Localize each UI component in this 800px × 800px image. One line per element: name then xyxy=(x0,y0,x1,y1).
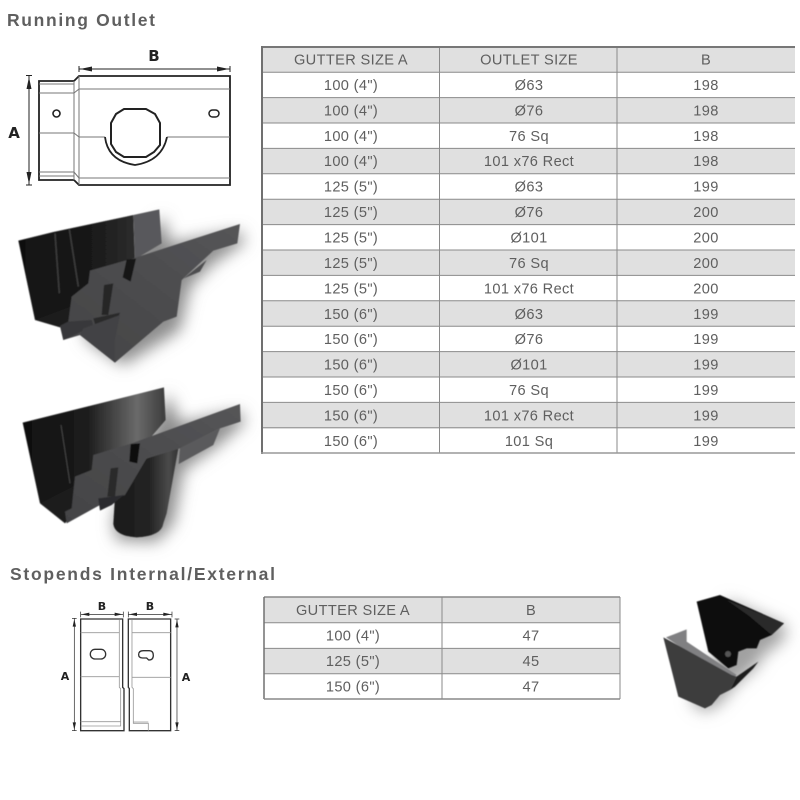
row: 198 xyxy=(693,104,719,120)
row fills xyxy=(262,47,795,428)
row: 150 (6") xyxy=(324,358,378,374)
row: Ø76 xyxy=(515,205,543,221)
row xyxy=(324,154,719,170)
table header: B xyxy=(526,603,536,619)
row: 150 (6") xyxy=(324,332,378,348)
row: 198 xyxy=(693,78,719,94)
row: Ø63 xyxy=(515,180,543,196)
row: 200 xyxy=(693,205,719,221)
row xyxy=(324,358,719,374)
pipe flange xyxy=(179,428,220,464)
row: Ø63 xyxy=(515,307,543,323)
row xyxy=(324,104,719,120)
row: 199 xyxy=(693,332,719,348)
row: 199 xyxy=(693,434,719,450)
outlet hole xyxy=(111,109,160,157)
photo: running outlet without pipe xyxy=(18,209,245,365)
gutter floor xyxy=(35,305,75,327)
row: Ø63 xyxy=(515,78,543,94)
table header: GUTTER SIZE A xyxy=(294,52,408,68)
row: 101 x76 Rect xyxy=(484,154,574,170)
diagram: running outlet dimensions xyxy=(26,66,230,185)
data table: stopends xyxy=(264,597,620,699)
title: Running Outlet: Running Outlet xyxy=(7,10,155,30)
row: 125 (5") xyxy=(326,654,380,670)
label A right: A xyxy=(182,671,191,684)
row: 100 (4") xyxy=(326,628,380,644)
row: 150 (6") xyxy=(324,434,378,450)
table header: GUTTER SIZE A xyxy=(296,603,410,619)
plate clips xyxy=(123,259,136,282)
row xyxy=(324,332,719,348)
row: 100 (4") xyxy=(324,129,378,145)
gutter body xyxy=(60,224,240,363)
back wall xyxy=(18,215,135,320)
row: 125 (5") xyxy=(324,180,378,196)
fixing holes xyxy=(53,110,60,117)
row: 76 Sq xyxy=(509,383,549,399)
rear stopend xyxy=(697,595,784,668)
row: 125 (5") xyxy=(324,230,378,246)
row: 199 xyxy=(693,408,719,424)
row: 47 xyxy=(523,680,539,696)
row xyxy=(326,628,539,644)
dimension arrow B xyxy=(79,66,230,72)
row xyxy=(324,282,719,298)
dimension arrows xyxy=(72,612,179,731)
data table: running outlet xyxy=(261,46,795,454)
row: Ø76 xyxy=(515,104,543,120)
row xyxy=(326,654,539,670)
front plate xyxy=(65,404,241,523)
row: 200 xyxy=(693,230,719,246)
outlet body outline xyxy=(39,76,230,185)
row: 100 (4") xyxy=(324,104,378,120)
row xyxy=(324,256,719,272)
table header: OUTLET SIZE xyxy=(480,52,578,68)
row xyxy=(324,78,719,94)
row: Ø76 xyxy=(515,332,543,348)
row xyxy=(324,205,719,221)
row: 199 xyxy=(693,383,719,399)
photo: running outlet with pipe xyxy=(23,387,245,542)
row: 150 (6") xyxy=(324,408,378,424)
row: 200 xyxy=(693,256,719,272)
row: 125 (5") xyxy=(324,282,378,298)
row xyxy=(326,680,539,696)
row fills xyxy=(264,597,620,674)
table header xyxy=(296,603,536,619)
plate clips xyxy=(129,443,140,463)
downpipe xyxy=(113,448,178,537)
row: 199 xyxy=(693,358,719,374)
table header: B xyxy=(701,52,711,68)
row: 76 Sq xyxy=(509,129,549,145)
row xyxy=(324,408,719,424)
shadow xyxy=(80,217,245,365)
title: Stopends Internal/External: Stopends Internal/External xyxy=(10,564,275,584)
row: 150 (6") xyxy=(326,680,380,696)
row xyxy=(324,129,719,145)
row: 150 (6") xyxy=(324,307,378,323)
label B: B xyxy=(148,47,160,65)
gutter floor xyxy=(40,483,80,523)
diagram: stopends dimensions xyxy=(72,612,179,731)
row: 101 x76 Rect xyxy=(484,408,574,424)
row: 125 (5") xyxy=(324,256,378,272)
label A left: A xyxy=(61,670,70,683)
row: 76 Sq xyxy=(509,256,549,272)
front stopend return xyxy=(730,662,758,690)
row: 199 xyxy=(693,307,719,323)
shadow xyxy=(113,393,245,542)
row: 47 xyxy=(523,628,539,644)
external stopend xyxy=(128,619,171,731)
row: 101 Sq xyxy=(505,434,553,450)
row: 199 xyxy=(693,180,719,196)
row xyxy=(324,434,719,450)
internal stopend xyxy=(81,619,124,731)
outlet arc xyxy=(105,137,167,165)
row: 125 (5") xyxy=(324,205,378,221)
label A: A xyxy=(8,124,20,142)
shadow xyxy=(690,600,787,712)
row: 198 xyxy=(693,154,719,170)
row: 150 (6") xyxy=(324,383,378,399)
row: 198 xyxy=(693,129,719,145)
back wall xyxy=(23,387,166,503)
row: 100 (4") xyxy=(324,78,378,94)
front stopend inner xyxy=(666,629,737,680)
row xyxy=(324,383,719,399)
row: 200 xyxy=(693,282,719,298)
row xyxy=(324,307,719,323)
label B right: B xyxy=(146,600,154,613)
dimension arrow A xyxy=(26,76,32,185)
row: 100 (4") xyxy=(324,154,378,170)
photo: stopends xyxy=(663,595,787,712)
row: 45 xyxy=(523,654,539,670)
table header xyxy=(294,52,711,68)
row xyxy=(324,180,719,196)
row: 101 x76 Rect xyxy=(484,282,574,298)
row: Ø101 xyxy=(510,358,548,374)
row: Ø101 xyxy=(510,230,548,246)
label B left: B xyxy=(98,600,106,613)
row xyxy=(324,230,719,246)
front stopend face xyxy=(663,637,737,708)
